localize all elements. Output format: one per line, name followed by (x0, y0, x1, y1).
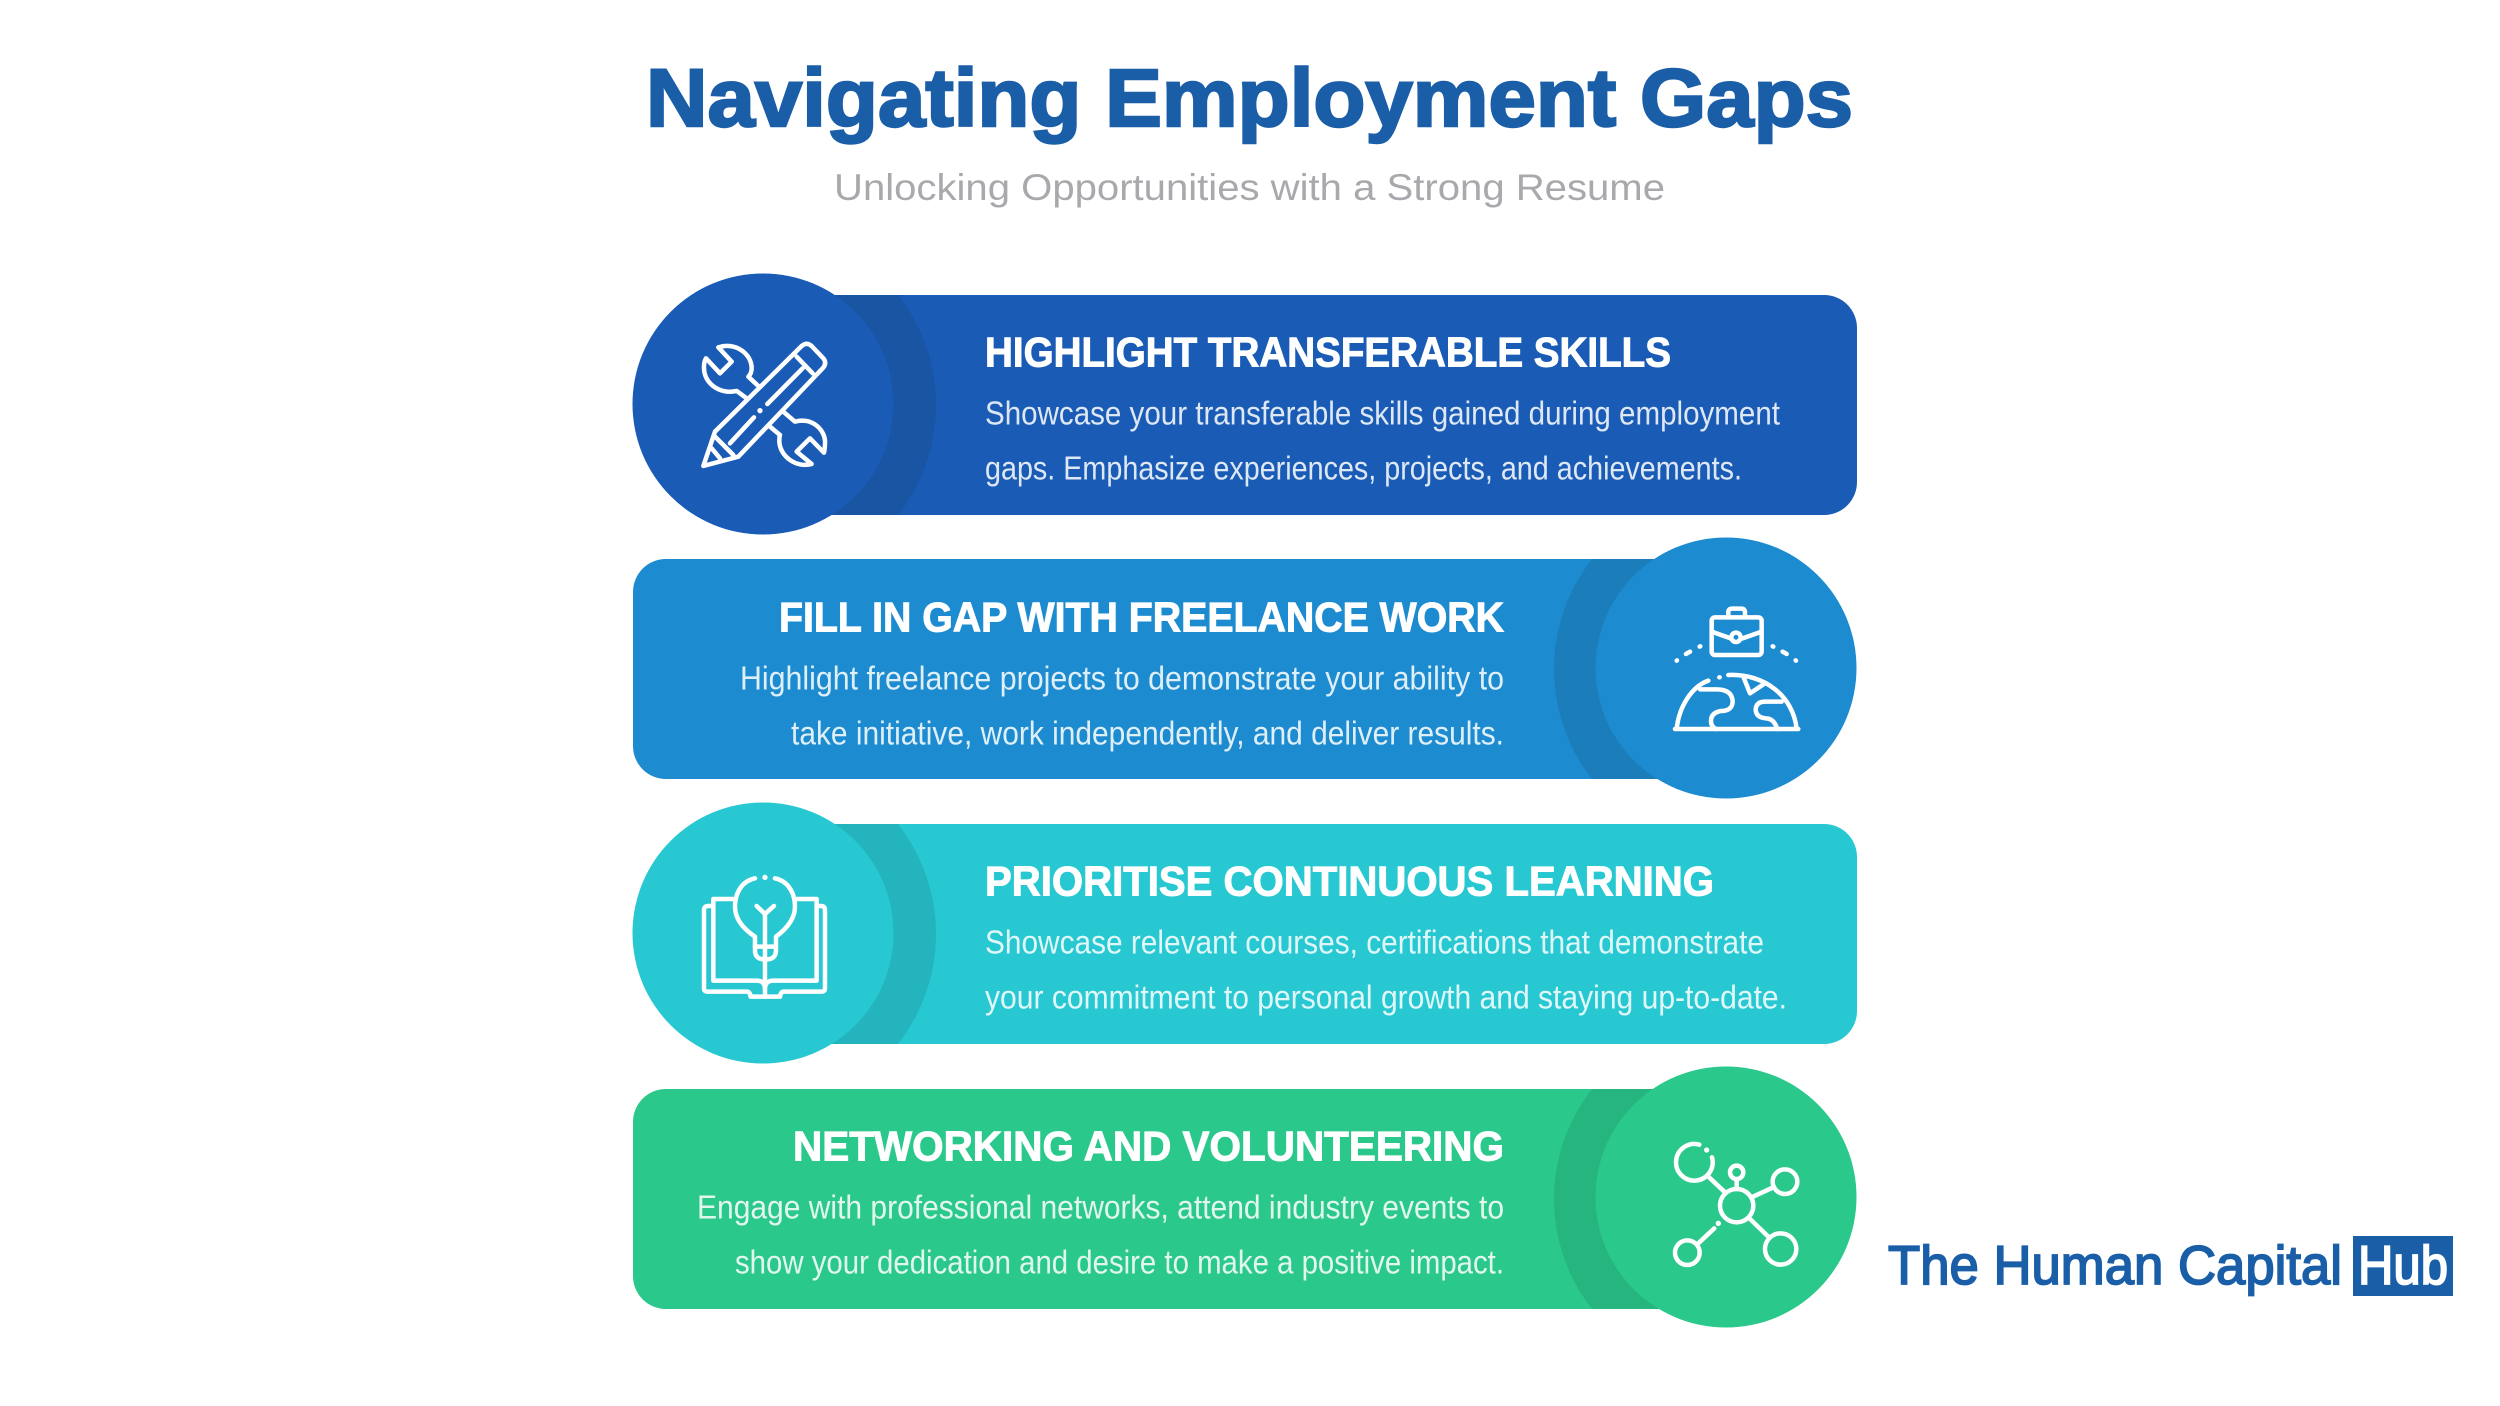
body text (740, 660, 1504, 752)
logo: The Human Capital Hub (1888, 1234, 2453, 1296)
panel: prioritise continuous learning (632, 802, 1857, 1064)
body text: show your dedication and desire to make a positive impact. (735, 1244, 1504, 1280)
heading: PRIORITISE CONTINUOUS LEARNING (985, 858, 1714, 904)
icon: briefcase over globe (1675, 609, 1798, 729)
band (633, 1089, 1726, 1309)
body text: take initiative, work independently, and deliver results. (791, 714, 1504, 752)
body text: gaps. Emphasize experiences, projects, and achievements. (985, 450, 1742, 486)
icon circle (1596, 538, 1856, 798)
body text (985, 924, 1787, 1016)
band (763, 295, 1857, 515)
panel: highlight transferable skills (632, 274, 1857, 534)
band shadow arc (832, 295, 936, 515)
logo wordmark: The Human Capital (1888, 1234, 2342, 1296)
icon: open book with light bulb (704, 875, 825, 997)
icon circle (632, 802, 894, 1064)
title: Navigating Employment Gaps (646, 53, 1853, 144)
band (763, 824, 1857, 1044)
logo box (2353, 1236, 2453, 1296)
body text: your commitment to personal growth and staying up-to-date. (985, 978, 1787, 1016)
panel: networking and volunteering (633, 1066, 1856, 1328)
icon circle (632, 274, 894, 534)
icon: wrench and pencil (703, 344, 825, 466)
body text: Highlight freelance projects to demonstrate your ability to (740, 660, 1504, 696)
icon circle (1596, 1066, 1856, 1328)
icon: network nodes (1675, 1144, 1797, 1265)
body text: Showcase your transferable skills gained during employment (985, 394, 1780, 432)
band shadow arc (1554, 1089, 1658, 1309)
subtitle: Unlocking Opportunities with a Strong Resume (834, 167, 1665, 208)
panel: fill in gap with freelance work (633, 538, 1856, 798)
body text (985, 394, 1780, 486)
band shadow arc (832, 824, 936, 1044)
logo box text: Hub (2358, 1234, 2448, 1296)
body text (697, 1188, 1504, 1280)
body text: Showcase relevant courses, certifications that demonstrate (985, 924, 1764, 960)
band (633, 559, 1726, 779)
body text: Engage with professional networks, attend industry events to (697, 1188, 1504, 1226)
heading: FILL IN GAP WITH FREELANCE WORK (779, 594, 1504, 640)
heading: HIGHLIGHT TRANSFERABLE SKILLS (985, 328, 1671, 376)
heading: NETWORKING AND VOLUNTEERING (793, 1122, 1504, 1170)
band shadow arc (1554, 559, 1657, 779)
